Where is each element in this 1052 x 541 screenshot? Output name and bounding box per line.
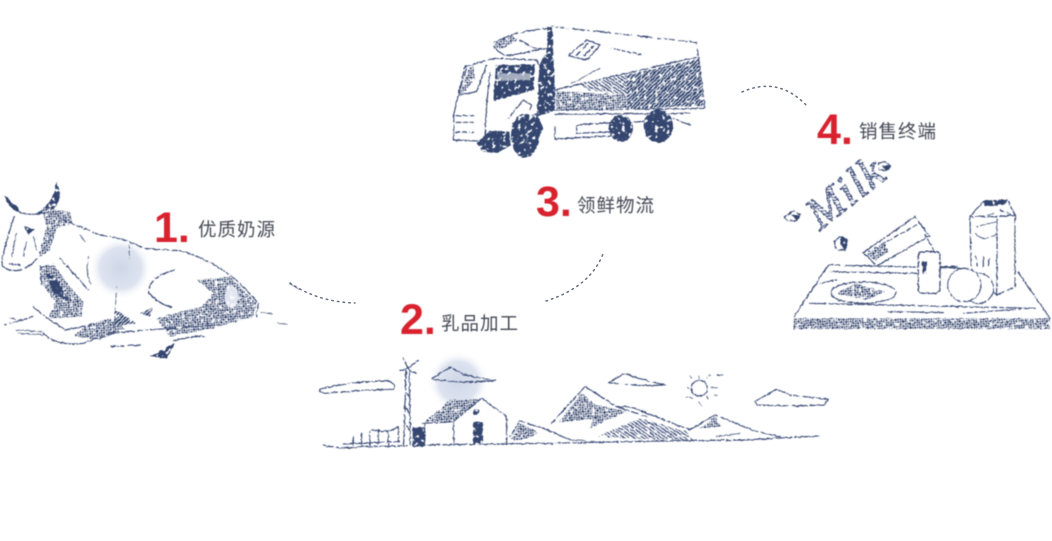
icon: cloud left [319,381,395,393]
illustration: milk products on table [784,146,1050,329]
icon: barn [413,398,507,447]
step 3: fresh logistics [453,27,705,226]
icon: cloud centre [608,373,665,385]
logo on box [568,40,600,60]
ground and fence [323,436,818,448]
icon: glass of milk [918,252,940,293]
cab pillar [537,27,555,117]
bumper [477,131,511,153]
step 1: quality milk source [2,182,299,359]
icon: plate [831,282,896,303]
icon: sun [687,375,723,407]
icon: cloud right [755,389,828,406]
rear wheels [609,115,633,142]
step label: 优质奶源: 优质奶源 [198,219,276,240]
step 2: dairy processing [319,296,828,448]
dotted connector: processing to logistics [546,254,603,301]
icon: sugar cubes [784,162,891,250]
step 4: sales terminal [784,106,1050,329]
cab window [493,64,535,101]
icon: mountains [510,387,780,442]
step number 1: 1. [154,204,190,252]
front wheel [511,114,539,158]
cargo box [552,27,705,110]
dotted connector: cow to processing [290,283,355,303]
word: Milk: Milk [795,146,894,239]
dotted connector: logistics to sales [742,86,806,105]
cab body [453,58,539,140]
step label: 乳品加工: 乳品加工 [441,313,519,334]
step number 4: 4. [817,106,853,154]
icon: windmill [400,358,418,445]
icon: resting cow [2,182,299,359]
table [794,265,1050,318]
step number 3: 3. [536,178,572,226]
chassis [555,113,690,139]
step number 2: 2. [400,296,436,344]
step label: 领鲜物流: 领鲜物流 [577,195,655,216]
illustration: farm house and mountains [319,351,828,448]
icon: milk carton [970,199,1015,295]
grille and bumper lines [455,116,476,132]
illustration: refrigerated truck [453,27,705,158]
wind deflector [493,28,548,56]
step label: 销售终端: 销售终端 [859,121,937,142]
icon: oranges [948,268,994,304]
table edge band [793,318,1050,329]
icon: cloud behind house [431,367,496,382]
icon: tilted carton pouring [863,217,935,266]
